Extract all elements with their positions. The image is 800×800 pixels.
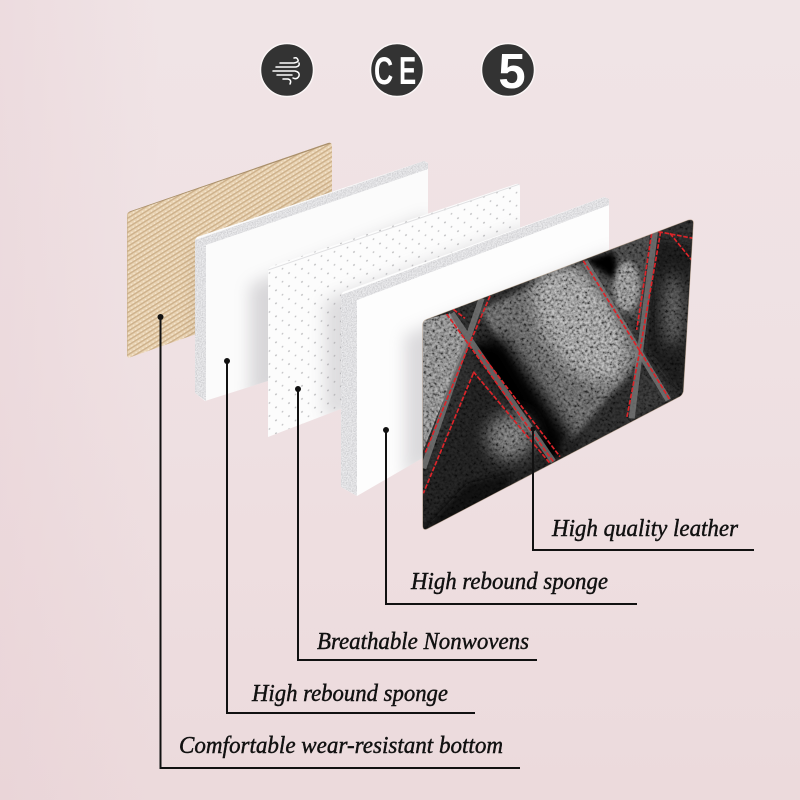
callout: nonwovens: [295, 386, 537, 660]
callout: second sponge: [383, 427, 637, 604]
icon: number 5: [482, 44, 534, 99]
layer: beige bottom fabric: [127, 142, 332, 358]
layer: first sponge: [190, 155, 435, 405]
leather grain: [420, 217, 697, 533]
callout: first sponge: [224, 358, 475, 713]
layer: black leather with red stitching: [420, 217, 697, 533]
stitched seams: [423, 232, 693, 493]
layer: breathable nonwoven: [268, 184, 520, 437]
icon: CE mark: E: [399, 50, 416, 93]
icon row: [260, 44, 534, 99]
layer: second sponge: [335, 190, 615, 502]
callout: bottom fabric: [158, 314, 520, 768]
icon: CE mark: [370, 44, 424, 96]
label: high rebound sponge upper: High rebound sponge: [410, 569, 608, 595]
label: high quality leather: High quality leather: [551, 516, 739, 542]
icon: number 5: 5: [498, 45, 526, 99]
label: breathable nonwovens: Breathable Nonwovens: [317, 629, 529, 655]
icon: CE mark: C: [374, 50, 393, 93]
icon: breathable wind: [260, 44, 314, 96]
label: high rebound sponge lower: High rebound sponge: [251, 681, 448, 707]
callout: leather: [530, 426, 754, 550]
leather tone patches: [423, 233, 693, 532]
label: comfortable bottom: Comfortable wear-resistant bottom: [179, 733, 503, 759]
